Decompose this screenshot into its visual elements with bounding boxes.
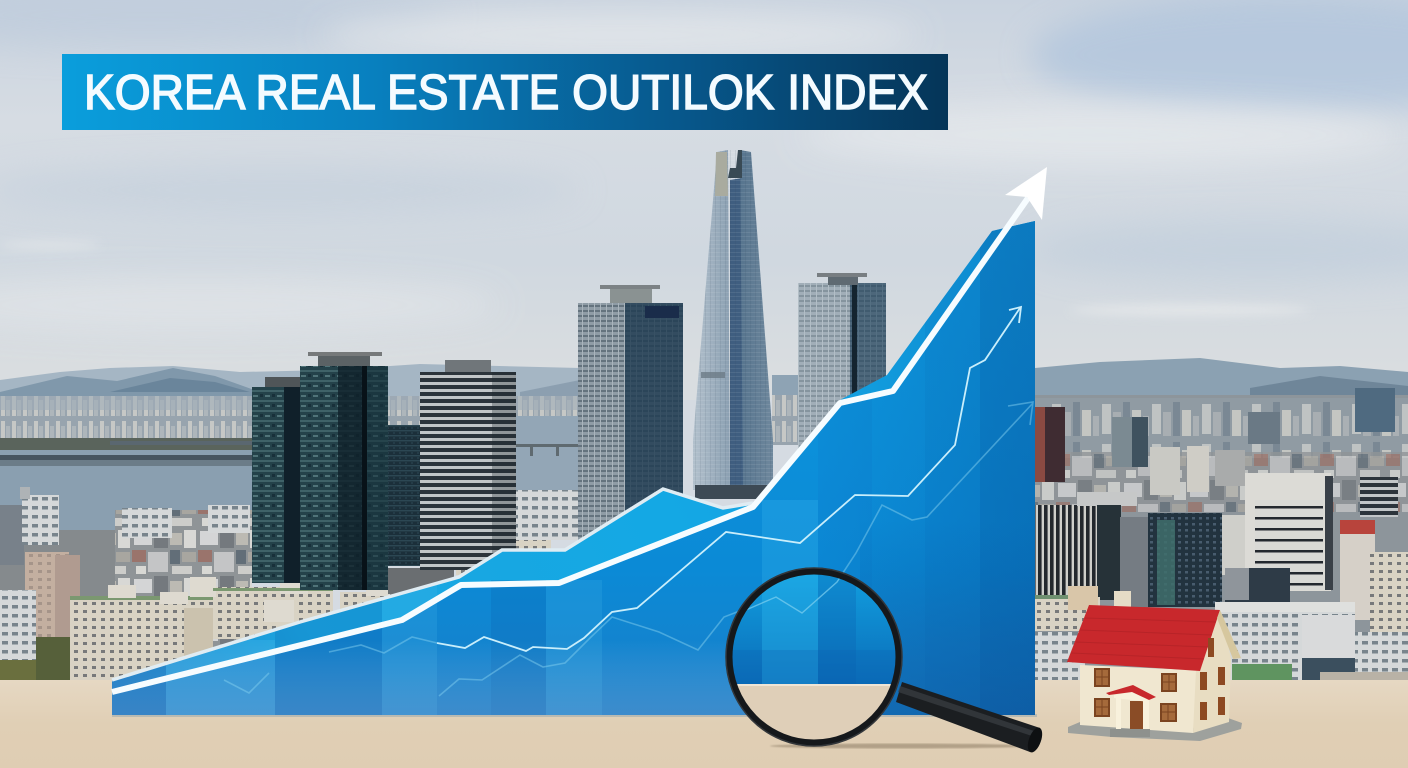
handle — [896, 682, 1040, 752]
side wall — [1193, 612, 1231, 733]
front windows — [1095, 669, 1176, 721]
right city — [1035, 388, 1408, 683]
skyscraper cluster — [252, 150, 886, 590]
thin white trend line with arrow — [437, 307, 1021, 651]
chimney — [1114, 591, 1131, 613]
magnifying glass — [725, 567, 1042, 752]
side windows — [1200, 638, 1225, 720]
wooden table — [0, 680, 1408, 768]
title bar — [62, 54, 948, 130]
distant mountains — [0, 358, 1408, 402]
building: tall glass tower with helipad — [578, 285, 683, 540]
door — [1130, 701, 1143, 729]
building: supertall tower — [693, 150, 773, 499]
front wall — [1080, 665, 1196, 733]
roof shingle lines — [1071, 618, 1216, 659]
lower chart fill with columns — [112, 200, 1035, 720]
roof gable edge — [1217, 610, 1241, 659]
main roof — [1067, 605, 1220, 671]
shadow on table — [770, 744, 1030, 748]
building: right glass tower with helipad — [798, 273, 886, 453]
ring — [729, 571, 899, 743]
building: narrow grey tower — [388, 425, 420, 566]
building: striped office tower — [420, 360, 516, 570]
porch step — [1110, 729, 1150, 737]
title text: KOREA REAL ESTATE OUTILOK INDEX — [84, 66, 928, 120]
faint third trend line with arrow — [224, 402, 1033, 696]
distant city and river — [0, 395, 798, 540]
chart base shadow — [112, 714, 1037, 717]
house base — [1068, 718, 1242, 741]
chart area fill — [112, 221, 1035, 715]
model house — [1067, 591, 1242, 741]
area chart — [112, 167, 1047, 720]
building: dark glass left pair — [252, 352, 388, 590]
left foreground city — [0, 487, 580, 682]
chart top edge highlight — [112, 489, 753, 680]
sky background — [0, 0, 1408, 400]
lens — [732, 574, 895, 717]
porch roof — [1106, 685, 1156, 700]
main white trend line — [112, 198, 1028, 692]
main arrow head — [1005, 167, 1047, 220]
porch pillars — [1114, 692, 1149, 730]
title banner — [62, 54, 948, 130]
